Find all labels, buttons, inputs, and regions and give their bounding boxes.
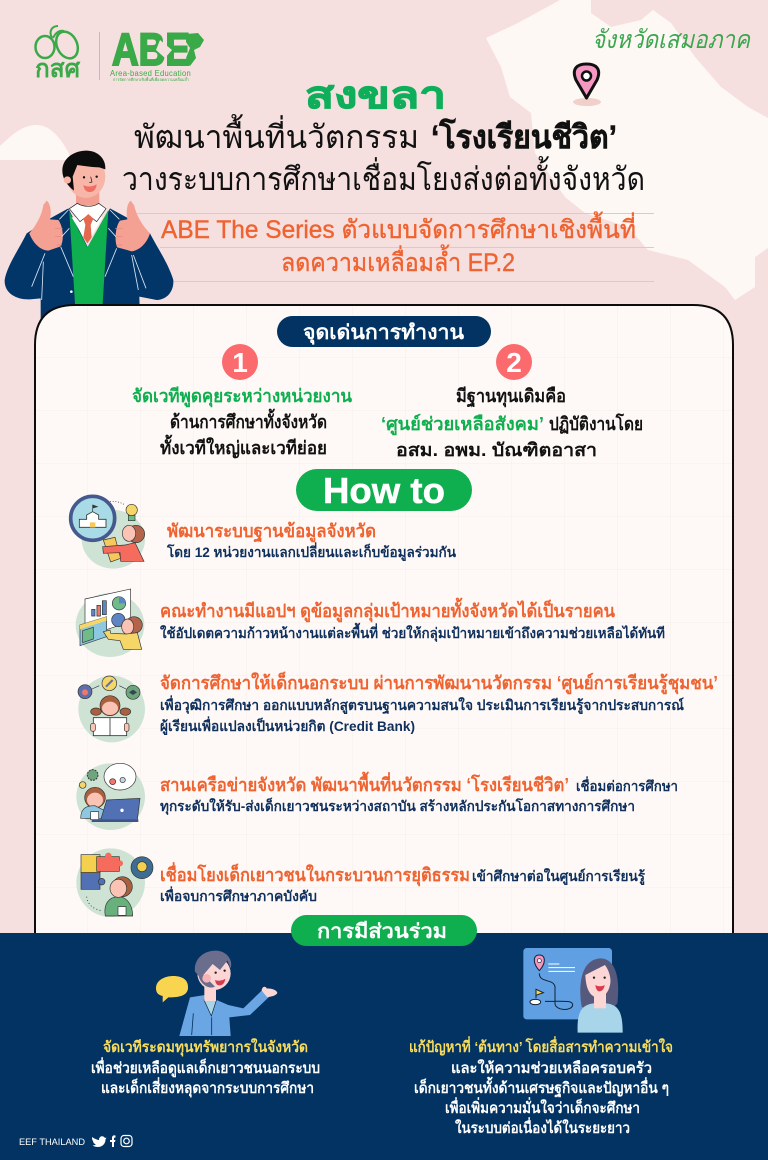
participation right text: เพื่อเพิ่มความมั่นใจว่าเด็กจะศึกษา xyxy=(445,1097,640,1117)
section pill: participation: การมีส่วนร่วม xyxy=(317,920,447,943)
section pill: how to: How to xyxy=(323,470,445,511)
participation left text: และเด็กเสี่ยงหลุดจากระบบการศึกษา xyxy=(101,1077,314,1098)
illustration: woman with route map xyxy=(523,948,623,1033)
how-to 2 text: คณะทำงานมีแอปฯ ดูข้อมูลกลุ่มเป้าหมายทั้งจังหวัดได้เป็นรายคน xyxy=(160,597,616,623)
icon: twitter xyxy=(92,1136,106,1147)
background cloud xyxy=(0,125,72,160)
how-to 4 text: ทุกระดับให้รับ-ส่งเด็กเยาวชนระหว่างสถาบัน สร้างหลักประกันโอกาสทางการศึกษา xyxy=(160,797,635,815)
illustration: speaking man xyxy=(156,951,277,1036)
subtitle line 2: วางระบบการศึกษาเชื่อมโยงส่งต่อทั้งจังหวัด xyxy=(122,156,645,197)
icon: instagram xyxy=(121,1136,132,1146)
highlight 1: 1 xyxy=(232,347,248,378)
logo divider xyxy=(99,32,100,80)
subtitle line 1: ‘โรงเรียนชีวิต’ xyxy=(431,118,617,155)
logo: EEF: กสศ xyxy=(35,55,81,83)
participation left text: จัดเวทีระดมทุนทรัพยากรในจังหวัด xyxy=(103,1038,308,1057)
icon: location pin xyxy=(573,64,601,106)
logo: EEF xyxy=(35,26,82,83)
panel: participation band xyxy=(0,915,768,1160)
how-to 5 text: เชื่อมโยงเด็กเยาวชนในกระบวนการยุติธรรม xyxy=(160,862,470,887)
participation left text xyxy=(91,1038,320,1098)
subtitle line 1: พัฒนาพื้นที่นวัตกรรม xyxy=(134,114,419,155)
icon: reading child xyxy=(78,676,145,742)
highlight 2: ปฏิบัติงานโดย xyxy=(549,413,643,434)
section pill: how to xyxy=(296,469,472,511)
how-to 4 text xyxy=(160,771,678,815)
how-to 3 text: จัดการศึกษาให้เด็กนอกระบบ ผ่านการพัฒนานวัตกรรม ‘ศูนย์การเรียนรู้ชุมชน’ xyxy=(160,671,718,695)
subtitle line 1 xyxy=(134,114,617,155)
how-to 2 text: ใช้อัปเดตความก้าวหน้างานแต่ละพื้นที่ ช่วยให้กลุ่มเป้าหมายเข้าถึงความช่วยเหลือได้ทันที xyxy=(160,622,665,642)
title: Songkhla: สงขลา xyxy=(305,75,446,117)
panel: main card xyxy=(35,305,733,935)
how-to 1 text: โดย 12 หน่วยงานแลกเปลี่ยนและเก็บข้อมูลร่วมกัน xyxy=(166,542,456,561)
background map of province xyxy=(486,0,768,300)
series heading: ABE The Series ตัวแบบจัดการศึกษาเชิงพื้นที่ xyxy=(161,211,636,244)
icon: child with laptop xyxy=(76,763,145,830)
how-to 3 text: ผู้เรียนเพื่อแปลงเป็นหน่วยกิต (Credit Bank) xyxy=(160,716,415,735)
participation left text: เพื่อช่วยเหลือดูแลเด็กเยาวชนนอกระบบ xyxy=(91,1057,320,1078)
participation right text: และให้ความช่วยเหลือครอบครัว xyxy=(451,1059,652,1077)
illustration: man with thumbs up xyxy=(5,151,173,320)
highlight 1 xyxy=(132,344,353,459)
how-to 4 text: สานเครือข่ายจังหวัด พัฒนาพื้นที่นวัตกรรม ‘โรงเรียนชีวิต’ xyxy=(160,771,569,795)
highlight 1: ทั้งเวทีใหญ่และเวทีย่อย xyxy=(160,434,327,459)
how-to 2 text xyxy=(160,597,665,642)
footer: social handle: EEF THAILAND xyxy=(19,1137,85,1148)
logo: ABE: ABE xyxy=(112,24,190,75)
series lines xyxy=(137,214,654,282)
logo: ABE: Area-based Education xyxy=(110,69,191,78)
highlight 2 xyxy=(381,344,643,460)
logo: ABE: การจัดการศึกษาเชิงพื้นที่เพื่อลดความเหลื่อมล้ำ xyxy=(113,75,189,82)
participation right text: แก้ปัญหาที่ ‘ต้นทาง’ โดยสื่อสารทำความเข้าใจ xyxy=(409,1036,673,1056)
participation right text: เด็กเยาวชนทั้งด้านเศรษฐกิจและปัญหาอื่น ๆ xyxy=(414,1076,669,1098)
how-to 3 text: เพื่อวุฒิการศึกษา ออกแบบหลักสูตรบนฐานความสนใจ ประเมินการเรียนรู้จากประสบการณ์ xyxy=(160,695,684,715)
footer: social handle xyxy=(19,1135,132,1148)
section pill: work highlights: จุดเด่นการทำงาน xyxy=(303,322,464,345)
icon: magnifier and school xyxy=(71,496,145,569)
how-to 1 text: พัฒนาระบบฐานข้อมูลจังหวัด xyxy=(167,521,376,543)
series heading xyxy=(161,211,636,277)
highlight 2: อสม. อพม. บัณฑิตอาสา xyxy=(396,440,597,460)
icon: puzzle and thinker xyxy=(76,848,153,917)
how-to 4 text: เชื่อมต่อการศึกษา xyxy=(576,776,678,794)
participation right text: ในระบบต่อเนื่องได้ในระยะยาว xyxy=(455,1117,630,1137)
series heading: ลดความเหลื่อมล้ำ EP.2 xyxy=(281,244,515,277)
how-to 5 text xyxy=(160,862,645,904)
how-to 3 text xyxy=(160,671,718,735)
highlight 2: 2 xyxy=(506,347,522,378)
how-to 5 text: เข้าศึกษาต่อในศูนย์การเรียนรู้ xyxy=(472,867,645,885)
icon: data board xyxy=(76,589,144,657)
how-to 1 text xyxy=(166,521,456,561)
icon: facebook xyxy=(110,1135,116,1147)
section pill: participation xyxy=(291,915,477,946)
highlight 1: ด้านการศึกษาทั้งจังหวัด xyxy=(170,408,327,432)
section pill: work highlights xyxy=(277,316,491,347)
highlight 2: มีฐานทุนเดิมคือ xyxy=(456,386,566,408)
script label: province equity: จังหวัดเสมอภาค xyxy=(592,26,751,54)
participation right text xyxy=(409,1036,673,1137)
highlight 2: ‘ศูนย์ช่วยเหลือสังคม’ xyxy=(381,413,544,436)
highlight 1: จัดเวทีพูดคุยระหว่างหน่วยงาน xyxy=(132,386,353,408)
how-to 5 text: เพื่อจบการศึกษาภาคบังคับ xyxy=(160,886,317,904)
